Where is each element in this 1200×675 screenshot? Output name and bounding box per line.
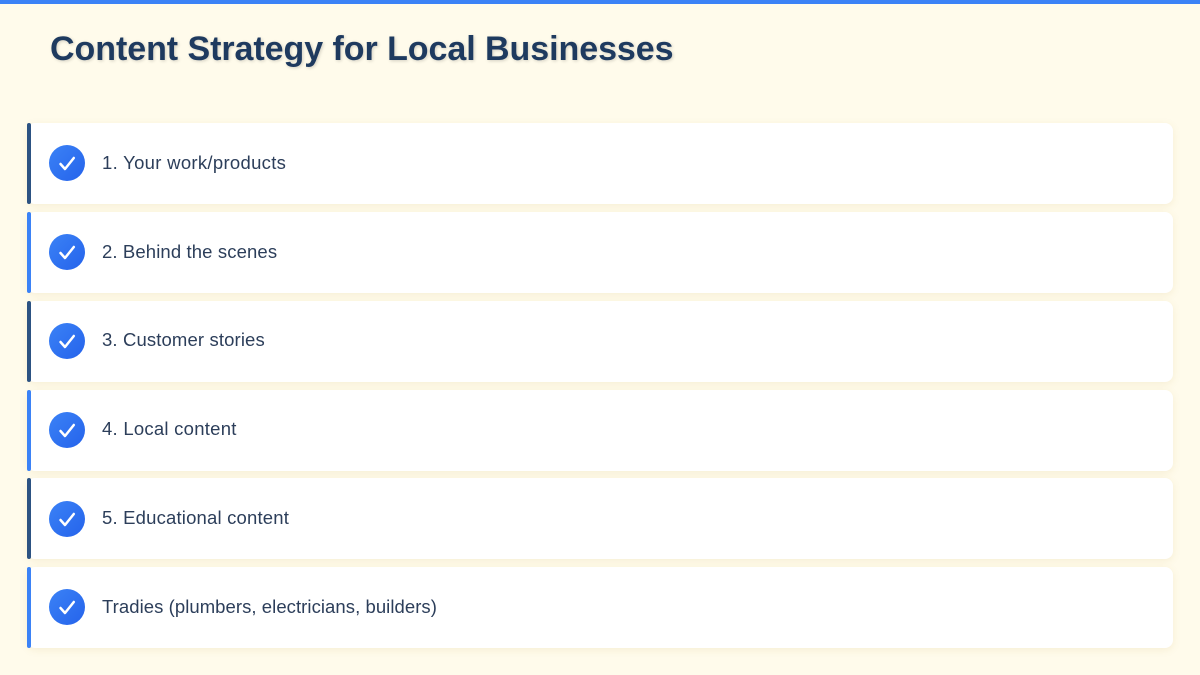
- text: item 4: 4. Local content: [102, 418, 237, 439]
- panel: item 1: [27, 123, 1173, 204]
- panel: item 4: [27, 390, 1173, 471]
- title: Content Strategy for Local Businesses: [50, 30, 674, 68]
- text: item 3: 3. Customer stories: [102, 329, 265, 350]
- icon: check circle 5: [49, 501, 85, 537]
- text: item 5: 5. Educational content: [102, 507, 289, 528]
- text: item 6: Tradies (plumbers, electricians, builders): [102, 596, 437, 617]
- icon: check circle 2: [49, 234, 85, 270]
- panel: item 2: [27, 212, 1173, 293]
- icon: check circle 4: [49, 412, 85, 448]
- panel: item 6: [27, 567, 1173, 648]
- icon: check circle 6: [49, 589, 85, 625]
- text: item 1: 1. Your work/products: [102, 152, 286, 173]
- top accent bar: [0, 0, 1200, 4]
- icon: check circle 1: [49, 145, 85, 181]
- panel: item 5: [27, 478, 1173, 559]
- panel: item 3: [27, 301, 1173, 382]
- text: item 2: 2. Behind the scenes: [102, 241, 277, 262]
- icon: check circle 3: [49, 323, 85, 359]
